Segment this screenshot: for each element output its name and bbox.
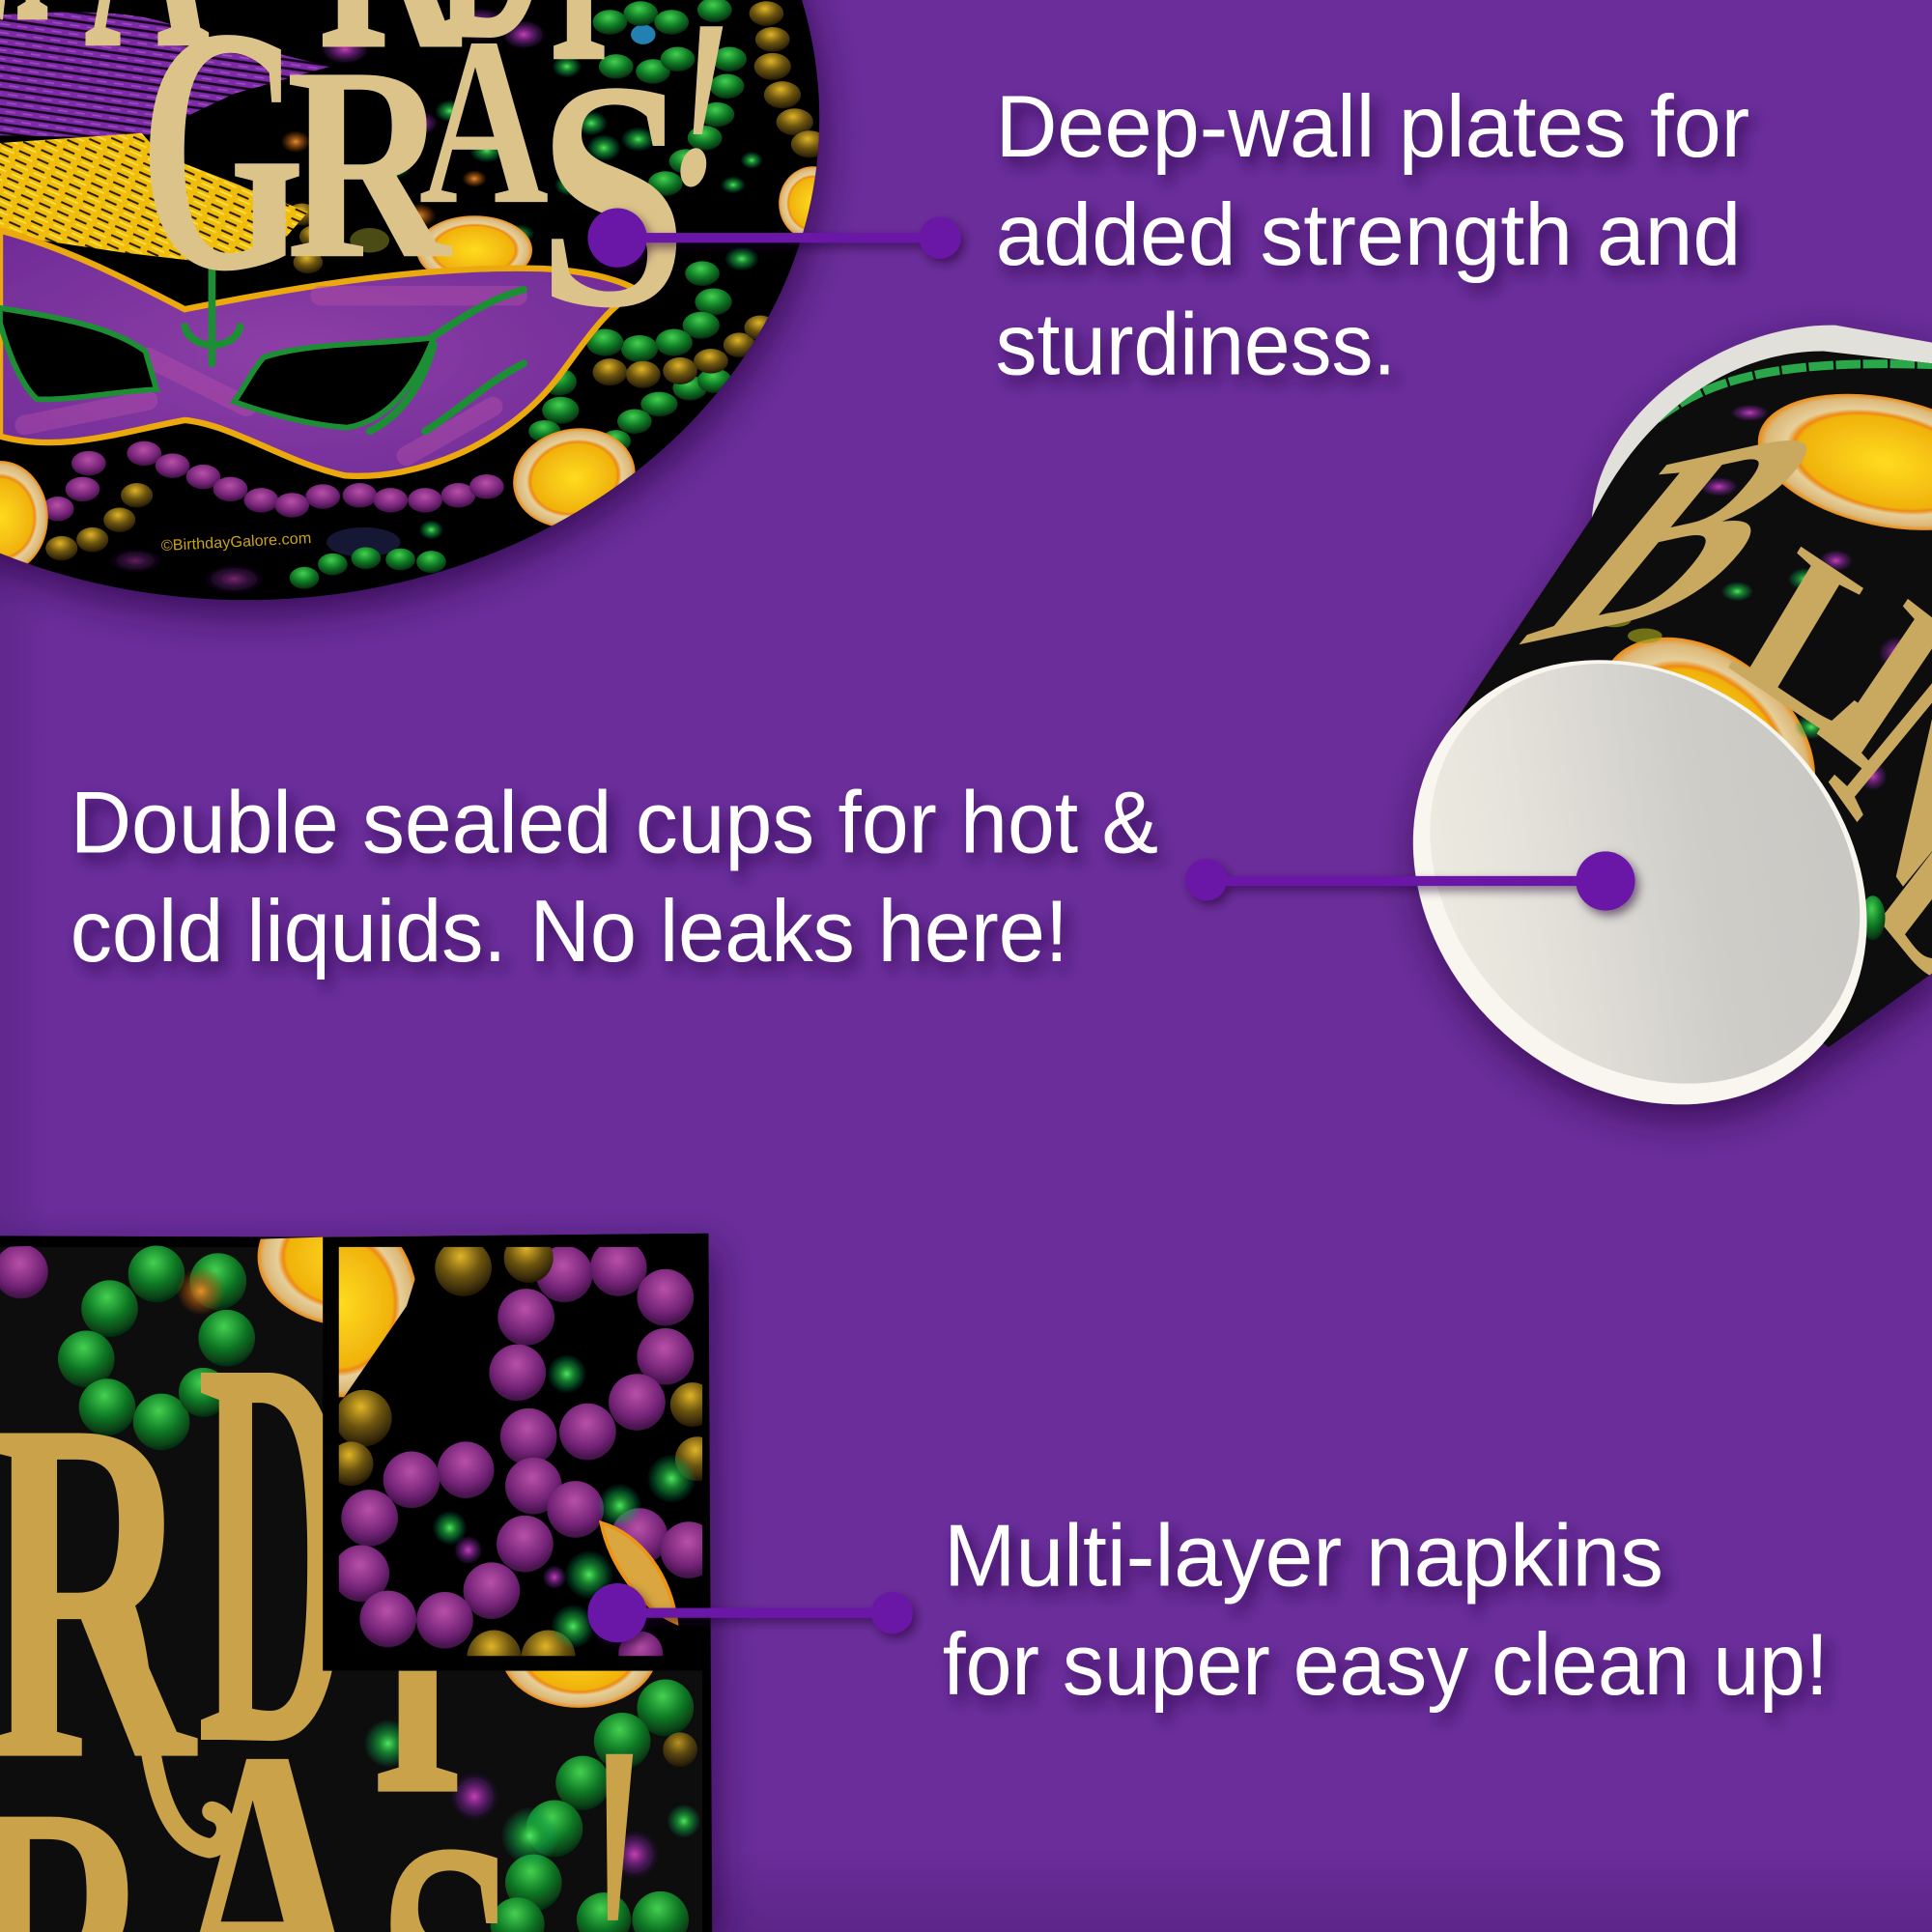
callout: plates text: added strength and xyxy=(996,186,1741,284)
plate lettering MARDI GRAS: S xyxy=(537,14,688,376)
cup bottom rim xyxy=(1322,568,1932,1196)
cup bead band xyxy=(1658,364,1932,419)
cup bottom inner surface xyxy=(1345,577,1932,1170)
plate illustration xyxy=(0,0,848,600)
gold coins on plate xyxy=(0,166,848,574)
cup coins xyxy=(1758,394,1932,530)
napkin gold lettering: I xyxy=(370,1354,466,1899)
cup lower beads xyxy=(1861,895,1886,940)
callout: napkins text: Multi-layer napkins xyxy=(944,1508,1663,1605)
fold gold leaf xyxy=(601,1523,676,1623)
cup sparkles xyxy=(1597,404,1918,791)
napkin gold lettering: D xyxy=(197,1241,353,1862)
napkin gold lettering xyxy=(0,1241,654,1932)
sparkle lights on plate xyxy=(108,8,763,594)
cup rim xyxy=(1592,326,1932,520)
napkin top coin xyxy=(258,1188,440,1325)
connector: napkins xyxy=(587,1583,913,1642)
callout: cups text: cold liquids. No leaks here! xyxy=(71,883,1068,980)
fold black triangle xyxy=(339,1247,518,1491)
callout: plates text: sturdiness. xyxy=(996,297,1396,394)
mask eye openings xyxy=(0,308,434,428)
plate lettering MARDI GRAS: R xyxy=(286,10,453,317)
fold purple beads xyxy=(329,1234,720,1685)
callout: plates text xyxy=(996,78,1749,394)
gold feather xyxy=(0,133,308,261)
callout: plates text: Deep-wall plates for xyxy=(996,78,1749,176)
napkin folded corner xyxy=(260,1210,720,1685)
cup gold lettering xyxy=(1519,440,1932,976)
cup gold lettering: B xyxy=(1465,360,1904,705)
purple feather xyxy=(0,13,330,138)
R leg swash xyxy=(124,1602,226,1848)
mask glitter xyxy=(25,296,518,456)
cup body xyxy=(1452,352,1932,1047)
connector: cups xyxy=(1185,851,1635,911)
connector: plates xyxy=(587,209,961,268)
callout: napkins text xyxy=(943,1508,1829,1714)
cup illustration xyxy=(1396,319,1932,1142)
copyright line: ©BirthdayGalore.com xyxy=(160,530,312,554)
callout: napkins text: for super easy clean up! xyxy=(943,1616,1829,1714)
masquerade mask xyxy=(0,231,639,476)
napkin green beads xyxy=(0,1244,701,1932)
fold coin xyxy=(260,1210,417,1397)
callout: cups text xyxy=(71,775,1158,980)
mask green filigree xyxy=(185,264,524,431)
plate lettering MARDI GRAS xyxy=(0,0,723,307)
callout: cups text: Double sealed cups for hot & xyxy=(71,775,1158,872)
napkin lower panel xyxy=(0,1247,702,1932)
green, gold and purple beads on plate xyxy=(42,0,828,589)
napkin lower coin xyxy=(500,1595,658,1708)
napkin illustration xyxy=(0,1188,720,1932)
